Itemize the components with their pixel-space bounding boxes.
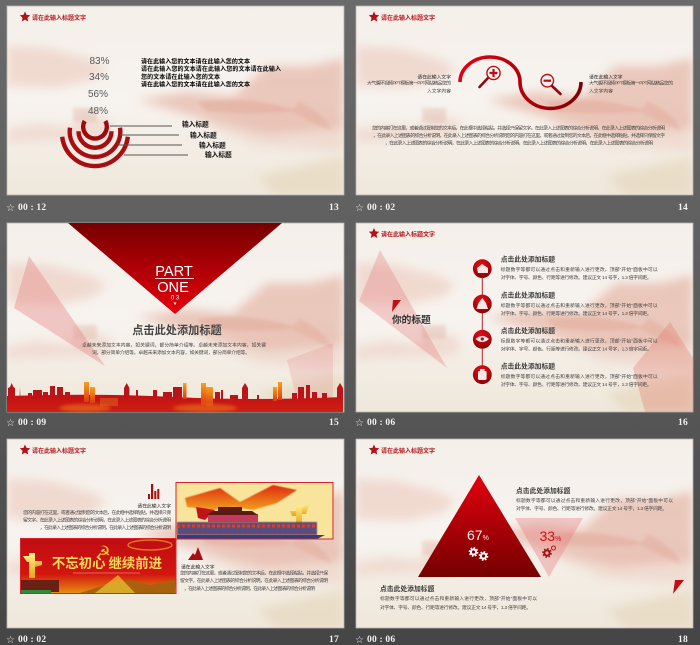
item 4: 对字体、字号、颜色、行距等进行修改。建议正文 14 号字，1.3 倍字间距。 xyxy=(501,381,652,388)
item 1 xyxy=(473,254,658,281)
image: banner: ☭ xyxy=(95,543,111,563)
item 3: 点击此处添加标题 xyxy=(501,326,555,335)
percentage list: 48% xyxy=(88,106,108,117)
text block lower: ，在此录入上述图表的综合分析说明，在此录入上述图表的综合分析说明 xyxy=(184,585,315,592)
text block: 请在此输入您的文本请在此输入您的文本 xyxy=(141,80,250,88)
body text: 您的内容打在这里，或者通过复制您的文本后，在此框中选择粘贴，并选择只保留文字。在此录入上述图表的综合分析说明，在此录入上述图表的综合分析说明 xyxy=(372,124,665,132)
icon: title star xyxy=(20,12,30,21)
footer 17: 00 : 02 xyxy=(18,635,46,645)
footer 18: 00 : 06 xyxy=(367,635,395,645)
right caption xyxy=(589,74,673,94)
part label xyxy=(155,264,194,305)
left caption: 大气循环视频PPT模板第一PPT网站精品您的 xyxy=(367,80,451,86)
text block upper: 留文字。在此录入上述图表的综合分析说明，在此录入上述图表的综合分析说明 xyxy=(23,516,171,524)
body text: ，在此录入上述图表的综合分析说明，在此录入上述图表的综合分析说明，在此录入上述图表的综合分析说明，在此录入上述图表的综合分析说明 xyxy=(385,140,653,146)
text block upper: 请在此输入文字 xyxy=(137,502,171,510)
percentage list: 34% xyxy=(89,72,109,83)
panel: slide 14 S curve xyxy=(356,6,693,195)
footer 13: 13 xyxy=(329,203,339,213)
footer 14: ☆ xyxy=(355,203,364,214)
arc labels: 输入标题 xyxy=(190,130,217,140)
pink inverted triangle 33% xyxy=(515,518,583,577)
text block lower: 留文字。在此录入上述图表的综合分析说明，在此录入上述图表的综合分析说明 xyxy=(180,577,328,584)
item 1: 对字体、字号、颜色、行距等进行修改。建议正文 14 号字，1.3 倍字间距。 xyxy=(501,274,652,281)
text block: 请在此输入您的文本请在此输入您的文本请在此输入 xyxy=(141,65,281,73)
pink triangle left xyxy=(359,250,447,368)
text block lower: 请在此输入文字 xyxy=(181,564,215,570)
item 1: 标题数字等都可以通过点击和重新输入进行更改，顶部“开始”面板中可以 xyxy=(501,266,658,273)
panel: slide 13 percentages and arcs xyxy=(7,6,344,195)
text block lower: 您的内容打在这里，或者通过复制您的文本后，在此框中选择粘贴，并选择只保 xyxy=(180,570,328,576)
text block lower left: 对字体、字号、颜色、行距等进行修改。建议正文 14 号字，1.3 倍字间距。 xyxy=(380,604,531,611)
item 2: 点击此处添加标题 xyxy=(501,290,555,300)
text block upper right: 点击此处添加标题 xyxy=(516,486,571,495)
item 2 xyxy=(473,290,658,317)
red flag xyxy=(673,580,684,594)
footer 18: 18 xyxy=(678,635,688,645)
footer 14 xyxy=(355,203,688,214)
panel: slide 17 images and text xyxy=(7,439,344,628)
part label: PART xyxy=(155,264,193,280)
main heading: 你的标题 xyxy=(392,313,431,326)
text block lower left: 点击此处添加标题 xyxy=(380,584,435,593)
timeline line xyxy=(481,268,483,375)
item 1: 点击此处添加标题 xyxy=(501,254,555,264)
text block xyxy=(141,58,281,88)
concentric arc chart xyxy=(62,121,128,166)
pink triangle left xyxy=(14,256,105,366)
right caption: 入文字内容 xyxy=(589,88,613,94)
panel: slide 15 section divider xyxy=(7,223,344,412)
footer 15 xyxy=(6,418,339,429)
footer 13: ☆ xyxy=(6,203,15,214)
value 33%: 33% xyxy=(540,528,561,544)
leader lines xyxy=(110,126,188,155)
icon: white gears xyxy=(470,548,488,560)
footer 15: 15 xyxy=(329,418,339,428)
right caption: 请在此输入文字 xyxy=(589,74,623,80)
icon: bar chart xyxy=(148,484,159,499)
text block: 您的文本请在此输入您的文本 xyxy=(141,73,220,81)
part label: 0 3 xyxy=(171,296,180,302)
footer 13 xyxy=(6,203,339,214)
slide title: 请在此输入标题文字 xyxy=(381,14,435,22)
footer 16: 00 : 06 xyxy=(367,418,395,428)
slide title: 请在此输入标题文字 xyxy=(381,230,435,238)
item 3: 标题数字等都可以通过点击和重新输入进行更改，顶部“开始”面板中可以 xyxy=(501,338,658,344)
red flag xyxy=(392,300,401,312)
item 2: 对字体、字号、颜色、行距等进行修改。建议正文 14 号字，1.3 倍字间距。 xyxy=(501,310,652,317)
text block upper right: 对字体、字号、颜色、行距等进行修改。建议正文 14 号字，1.3 倍字间距。 xyxy=(516,505,667,512)
text block upper xyxy=(23,502,171,531)
item 2: 标题数字等都可以通过点击和重新输入进行更改，顶部“开始”面板中可以 xyxy=(501,302,658,309)
panel: slide 16 timeline list xyxy=(356,223,693,412)
icon: title star xyxy=(369,228,379,238)
footer 16: 16 xyxy=(678,418,688,428)
icon: mountain xyxy=(188,547,203,560)
item 3: 对字体、字号、颜色、行距等进行修改。建议正文 14 号字，1.3 倍字间距。 xyxy=(501,346,652,352)
left caption xyxy=(367,74,451,94)
body text xyxy=(82,342,266,356)
text block upper right xyxy=(516,486,673,512)
image: banner: 不忘初心 继续前进 xyxy=(52,552,163,572)
text block lower left: 标题数字等都可以通过点击和重新输入进行更改，顶部“开始”面板中可以 xyxy=(380,595,537,602)
slide title: 请在此输入标题文字 xyxy=(381,447,435,455)
icon: red gears xyxy=(543,546,556,557)
red inverted triangle xyxy=(68,223,282,314)
icon: title star xyxy=(369,444,379,454)
item 4: 点击此处添加标题 xyxy=(501,362,555,370)
red triangle 67% xyxy=(418,475,541,577)
icon: magnifier minus xyxy=(541,74,560,94)
body text xyxy=(372,124,665,146)
image: banner xyxy=(20,538,176,594)
percentage list xyxy=(88,56,110,117)
heading: 点击此处添加标题 xyxy=(132,323,222,337)
text block upper right: 标题数字等都可以通过点击和重新输入进行更改，顶部“开始”面板中可以 xyxy=(516,497,673,504)
footer 14: 14 xyxy=(678,203,688,213)
arc labels: 输入标题 xyxy=(199,140,226,150)
arc labels: 输入标题 xyxy=(205,150,232,159)
slide title: 请在此输入标题文字 xyxy=(32,14,86,22)
pink shape right xyxy=(287,343,333,405)
arc labels: 输入标题 xyxy=(182,120,209,128)
slide title: 请在此输入标题文字 xyxy=(32,447,86,455)
left caption: 入文字内容 xyxy=(427,88,451,94)
text block: 请在此输入您的文本请在此输入您的文本 xyxy=(141,58,250,66)
footer 17: 17 xyxy=(329,635,339,645)
left caption: 请在此输入文字 xyxy=(417,74,451,80)
body text: 词，部分简单介绍等。卓越未来添加文本内容，如关键词，部分简单介绍等。 xyxy=(92,349,250,356)
footer 15: ☆ xyxy=(6,418,15,429)
image: national scene xyxy=(176,482,333,539)
text block upper: 您的内容打在这里，或者通过复制您的文本后，在此框中选择粘贴，并选择只保 xyxy=(23,509,171,516)
text block lower xyxy=(180,564,328,592)
body text: 卓越未来添加文本内容，如关键词，部分简单介绍等。卓越未来添加文本内容，如关键 xyxy=(82,342,266,348)
text block upper: ，在此录入上述图表的综合分析说明，在此录入上述图表的综合分析说明 xyxy=(40,524,171,531)
footer 17 xyxy=(6,635,339,645)
footer 16: ☆ xyxy=(355,418,364,429)
item 3 xyxy=(473,326,658,352)
arc labels xyxy=(182,120,232,159)
icon: title star xyxy=(20,444,30,454)
right caption: 大气循环视频PPT模板第一PPT网站精品您的 xyxy=(589,80,673,86)
footer 16 xyxy=(355,418,688,429)
footer 18 xyxy=(355,635,688,645)
S curve xyxy=(460,57,581,108)
footer 13: 00 : 12 xyxy=(18,203,46,213)
city skyline xyxy=(7,382,343,412)
pink shape right xyxy=(633,322,693,412)
value 67%: 67% xyxy=(467,527,489,543)
text block lower left xyxy=(380,584,537,611)
panel: slide 18 triangle proportions xyxy=(356,439,693,628)
percentage list: 56% xyxy=(88,89,108,100)
footer 14: 00 : 02 xyxy=(367,203,395,213)
icon: title star xyxy=(369,12,379,21)
icon: magnifier plus xyxy=(480,66,500,87)
percentage list: 83% xyxy=(90,56,110,67)
body text: ，在此录入上述图表的综合分析说明，在此录入上述图表的综合分析说明您的内容打在这里，或者通过复制您的文本后，在此框中选择粘贴，并选择只保留文字 xyxy=(373,132,665,139)
item 4 xyxy=(473,362,658,388)
part label: ONE xyxy=(157,280,189,296)
item 4: 标题数字等都可以通过点击和重新输入进行更改，顶部“开始”面板中可以 xyxy=(501,373,658,380)
footer 15: 00 : 09 xyxy=(18,418,46,428)
